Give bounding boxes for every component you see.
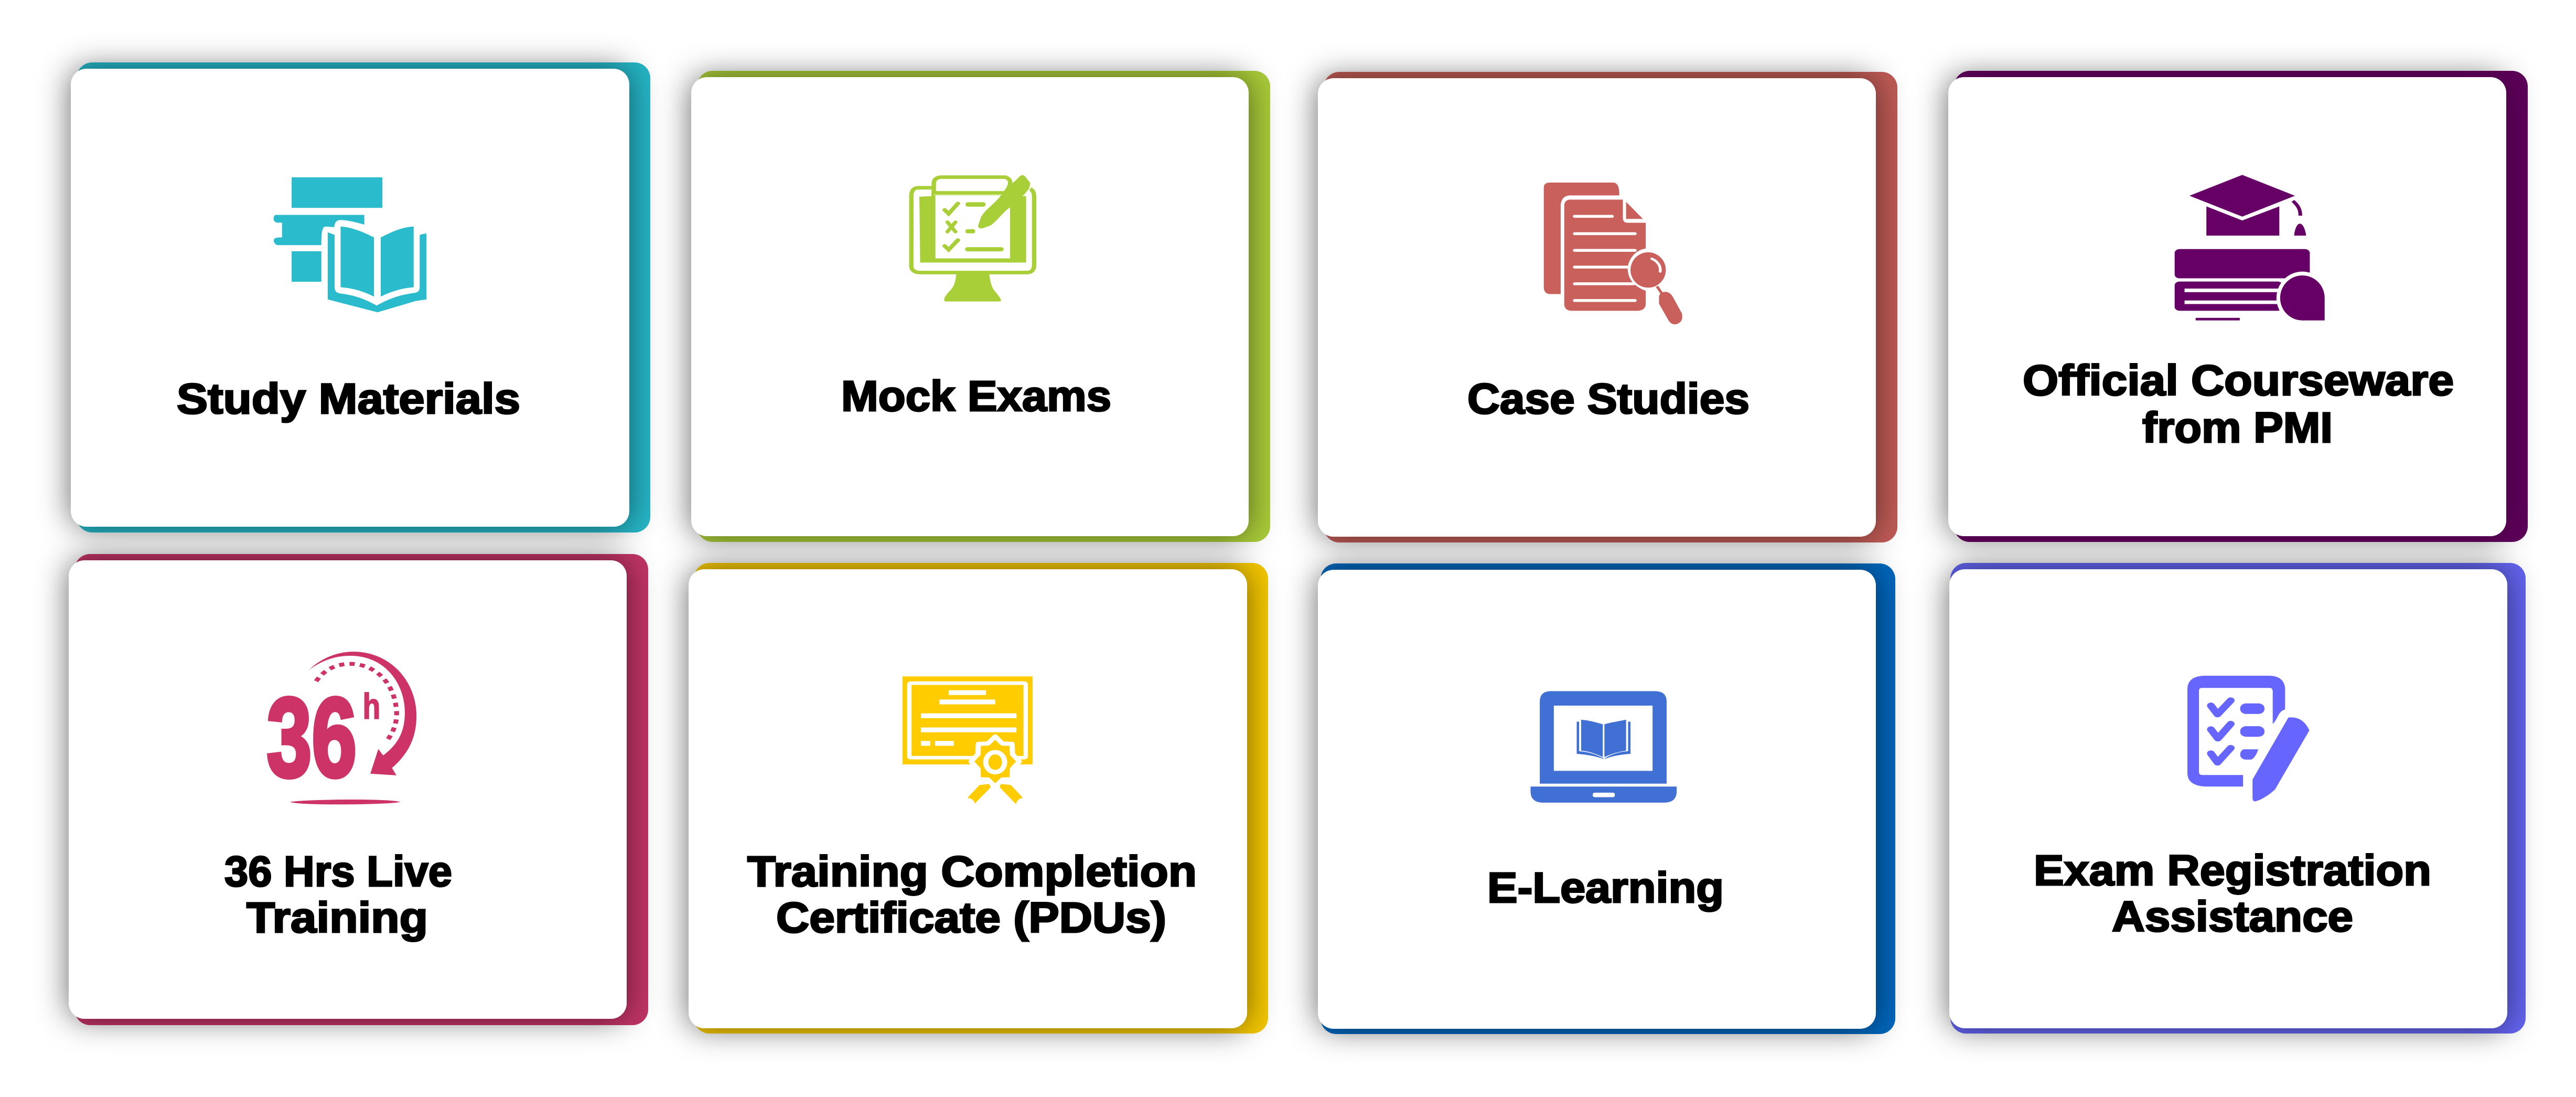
panel: Case Studies (1318, 72, 1897, 542)
label: E-Learning: E-Learning (1487, 864, 1724, 912)
icon: 36 hours clock arrow: h (363, 687, 380, 727)
label: Official Courseware from PMI: Official Courseware (2023, 357, 2454, 404)
label: Exam Registration Assistance (2034, 847, 2431, 941)
label: Mock Exams: Mock Exams (841, 372, 1111, 420)
label: Training Completion Certificate (PDUs): Training Completion (747, 848, 1197, 896)
icon: books (274, 177, 426, 312)
icon: documents and magnifier (1544, 183, 1682, 324)
icon: certificate with seal (903, 676, 1033, 804)
panel: Mock Exams (691, 71, 1270, 542)
panel: Training Completion Certificate (689, 563, 1268, 1034)
label: Official Courseware from PMI (2023, 357, 2454, 452)
label: 36 Hrs Live Training (224, 848, 452, 942)
label: Training Completion Certificate (PDUs) (747, 848, 1197, 942)
panel: E-Learning (1318, 563, 1895, 1034)
icon: checklist and pen (2187, 676, 2310, 801)
panel: Official Courseware from PMI (1948, 71, 2528, 542)
icon: laptop with book (1531, 691, 1677, 803)
label: Exam Registration Assistance: Assistance (2112, 893, 2353, 941)
label: 36 Hrs Live Training: 36 Hrs Live (224, 848, 452, 896)
label: Official Courseware from PMI: from PMI (2142, 404, 2333, 452)
icon: 36 hours clock arrow: 36 (267, 675, 357, 801)
icon: monitor with exam sheet (911, 175, 1034, 302)
label: Study Materials: Study Materials (177, 375, 520, 423)
panel: 36 Hrs Live Training (69, 554, 648, 1025)
icon: graduation cap on books (2175, 175, 2328, 324)
label: Training Completion Certificate (PDUs): Certificate (PDUs) (776, 894, 1166, 942)
label: Exam Registration Assistance: Exam Registration (2034, 847, 2431, 894)
label: 36 Hrs Live Training: Training (246, 894, 428, 942)
panel: Exam Registration Assistance (1949, 563, 2526, 1034)
label: Case Studies: Case Studies (1467, 375, 1749, 423)
panel: Study Materials (71, 62, 650, 532)
